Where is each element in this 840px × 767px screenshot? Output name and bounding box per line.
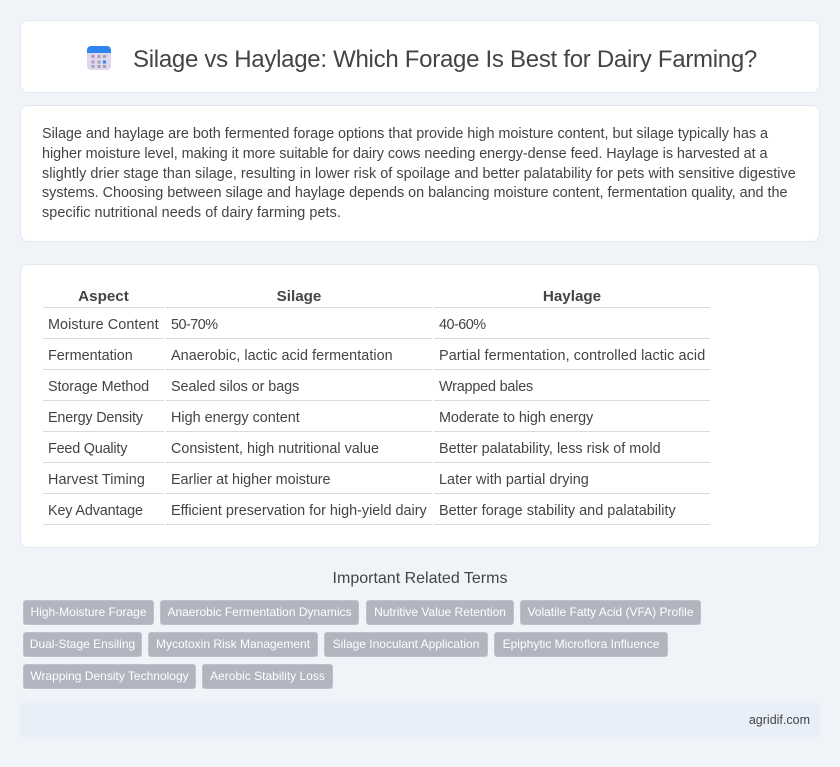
tag: [324, 632, 488, 657]
comparison table: [43, 288, 710, 525]
heading: related terms: Important Related Terms: [333, 570, 507, 587]
tag: [520, 600, 701, 625]
row: harvest timing: Harvest Timing: [48, 472, 145, 488]
panel: header: [20, 20, 820, 93]
row: harvest timing: [48, 472, 589, 488]
text block: introduction: [42, 126, 796, 221]
tag: Dual-Stage Ensiling: [30, 637, 135, 651]
row: feed quality: [48, 441, 661, 457]
row: energy density: Moderate to high energy: [439, 410, 593, 426]
row: storage method: [48, 379, 533, 395]
row: fermentation: Partial fermentation, controlled lactic acid: [439, 348, 705, 364]
row: fermentation: Fermentation: [48, 348, 133, 364]
row: feed quality: Better palatability, less risk of mold: [439, 441, 661, 457]
tag: Anaerobic Fermentation Dynamics: [167, 605, 352, 619]
row: energy density: Energy Density: [48, 410, 143, 426]
tag: Nutritive Value Retention: [374, 605, 506, 619]
footer: source: agridif.com: [749, 713, 810, 727]
row: storage method: Storage Method: [48, 379, 149, 395]
row: moisture content: 50-70%: [171, 317, 218, 333]
tag: [202, 664, 333, 689]
tag: Wrapping Density Technology: [30, 669, 189, 683]
tag: [494, 632, 668, 657]
tag cloud: related terms: [23, 600, 701, 689]
table header: [78, 288, 601, 305]
tag: Silage Inoculant Application: [333, 637, 479, 651]
row: key advantage: Key Advantage: [48, 503, 143, 519]
text block: introduction: slightly drier stage than silage, resulting in lower risk of spoilage and better palatability for pets with sensitive digestive: [42, 166, 796, 182]
row: key advantage: Efficient preservation for high-yield dairy: [171, 503, 427, 519]
tag: [23, 632, 142, 657]
row: key advantage: [48, 503, 676, 519]
tag: [366, 600, 514, 625]
text block: introduction: specific nutritional needs of dairy farming pets.: [42, 205, 341, 221]
table header: Aspect: [78, 288, 129, 305]
tag: [148, 632, 318, 657]
tag: [23, 664, 196, 689]
row: harvest timing: Later with partial drying: [439, 472, 589, 488]
row: storage method: Sealed silos or bags: [171, 379, 299, 395]
row: moisture content: [48, 317, 486, 333]
table header: Haylage: [543, 288, 601, 305]
text block: introduction: Silage and haylage are both fermented forage options that provide high moisture content, but silage typically has a: [42, 126, 768, 142]
row: harvest timing: Earlier at higher moisture: [171, 472, 330, 488]
tag: Epiphytic Microflora Influence: [503, 637, 659, 651]
tag: High-Moisture Forage: [30, 605, 147, 619]
panel: comparison table: [20, 264, 820, 548]
text block: introduction: higher moisture level, making it more suitable for dairy cows needing energy-dense feed. Haylage is harvested at a: [42, 146, 767, 162]
row: storage method: Wrapped bales: [439, 379, 533, 395]
row: energy density: [48, 410, 594, 426]
tag: [23, 600, 154, 625]
row: key advantage: Better forage stability and palatability: [439, 503, 676, 519]
row: energy density: High energy content: [171, 410, 300, 426]
table header: Silage: [277, 288, 321, 305]
tag: Aerobic Stability Loss: [210, 669, 325, 683]
footer: [20, 703, 820, 737]
row: fermentation: [48, 348, 705, 364]
tag: [160, 600, 359, 625]
tag: Mycotoxin Risk Management: [156, 637, 310, 651]
row: fermentation: Anaerobic, lactic acid fermentation: [171, 348, 393, 364]
row: feed quality: Feed Quality: [48, 441, 127, 457]
panel: introduction: [20, 105, 820, 242]
row: moisture content: 40-60%: [439, 317, 486, 333]
title: Silage vs Haylage: Which Forage Is Best for Dairy Farming?: [133, 46, 757, 73]
row: moisture content: Moisture Content: [48, 317, 159, 333]
icon: calendar: [87, 46, 111, 70]
tag: Volatile Fatty Acid (VFA) Profile: [527, 605, 694, 619]
row: feed quality: Consistent, high nutritional value: [171, 441, 379, 457]
text block: introduction: systems. Choosing between silage and haylage depends on balancing moisture content, fermentation quality, and the: [42, 185, 787, 201]
